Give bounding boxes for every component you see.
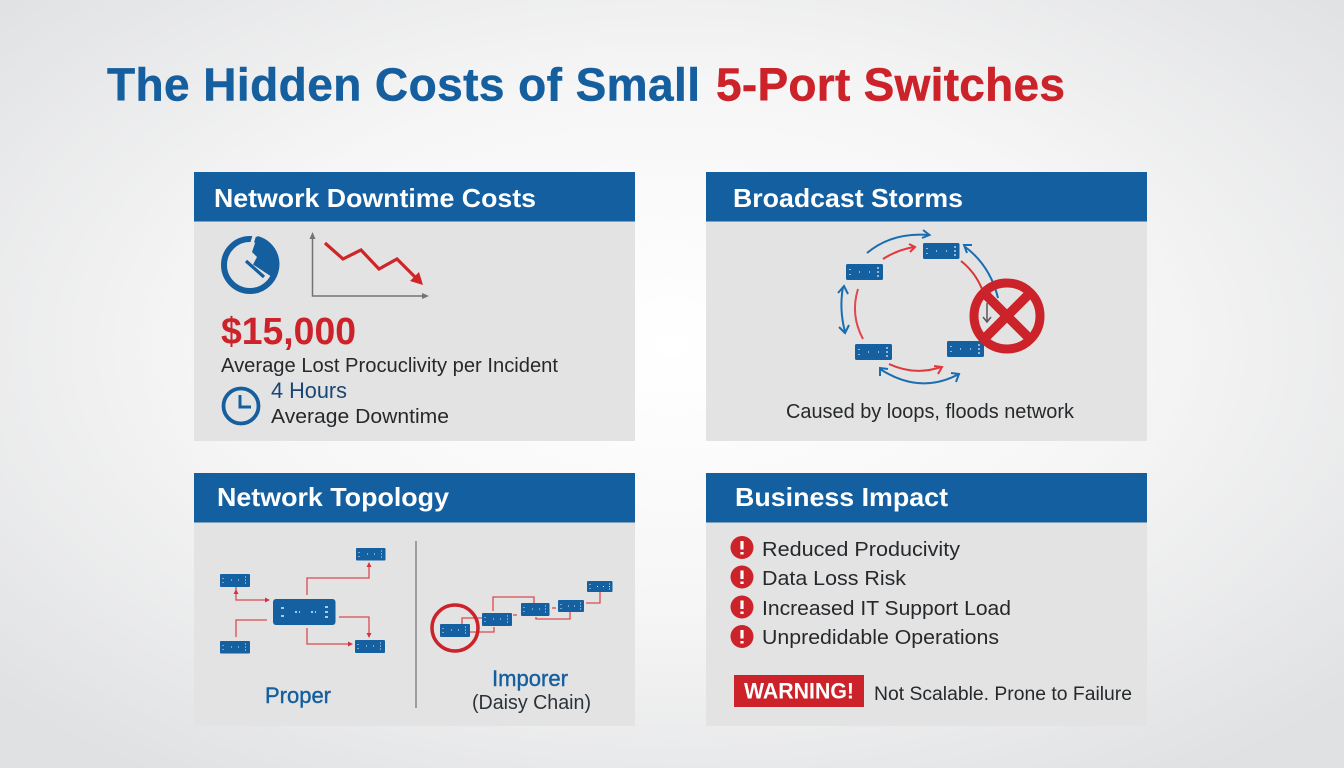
panel: broadcast storms xyxy=(706,172,1147,441)
stat: $15,000: $15,000 xyxy=(221,311,356,353)
stat: 4 hours: 4 Hours xyxy=(271,378,347,403)
divider xyxy=(415,541,417,708)
header: network downtime costs xyxy=(194,172,635,222)
loop arrows xyxy=(838,230,998,383)
panel: network topology xyxy=(194,473,635,726)
header: broadcast storms xyxy=(706,172,1147,222)
chain switches xyxy=(440,581,612,637)
small switches xyxy=(220,548,386,654)
impact item 1: Reduced Producivity xyxy=(762,539,960,561)
impact item 2 xyxy=(730,566,907,590)
icon: prohibition sign xyxy=(974,283,1040,349)
chart: falling line xyxy=(310,232,429,299)
caption: loops: Caused by loops, floods network xyxy=(786,401,1075,423)
failure circle xyxy=(432,605,478,651)
header: business impact xyxy=(706,473,1147,522)
title: 5-Port Switches xyxy=(716,58,1065,110)
title xyxy=(107,58,1065,110)
warning badge xyxy=(734,675,864,707)
star links xyxy=(236,565,369,644)
panel: business impact xyxy=(706,473,1147,726)
title: The Hidden Costs of Small xyxy=(107,58,700,110)
warning text: Not Scalable. Prone to Failure xyxy=(874,684,1132,705)
header: broadcast storms: Broadcast Storms xyxy=(733,183,963,213)
main switch xyxy=(273,599,336,625)
switches xyxy=(846,243,984,360)
arrowheads xyxy=(234,562,372,646)
label: daisy chain: (Daisy Chain) xyxy=(472,692,591,714)
diagram: daisy chain xyxy=(432,581,612,651)
diagram: switch loop xyxy=(838,230,1040,383)
header: network topology xyxy=(194,473,635,522)
label: improper: Imporer xyxy=(492,666,568,691)
diagram: proper star topology xyxy=(220,548,386,654)
header: business impact: Business Impact xyxy=(735,482,948,512)
icon: broken clock xyxy=(224,232,279,291)
label: proper: Proper xyxy=(265,683,331,708)
text: lost productivity: Average Lost Procuclivity per Incident xyxy=(221,355,558,377)
text: average downtime: Average Downtime xyxy=(271,406,449,428)
header: network downtime costs: Network Downtime Costs xyxy=(214,183,536,213)
chain links xyxy=(462,592,600,632)
impact item 2: Data Loss Risk xyxy=(762,568,907,590)
impact item 3: Increased IT Support Load xyxy=(762,598,1011,620)
icon: clock xyxy=(224,388,258,424)
header: network topology: Network Topology xyxy=(217,482,450,512)
panel: network downtime costs xyxy=(194,172,635,441)
impact item 4: Unpredidable Operations xyxy=(762,627,999,649)
warning badge: WARNING! xyxy=(744,678,854,704)
